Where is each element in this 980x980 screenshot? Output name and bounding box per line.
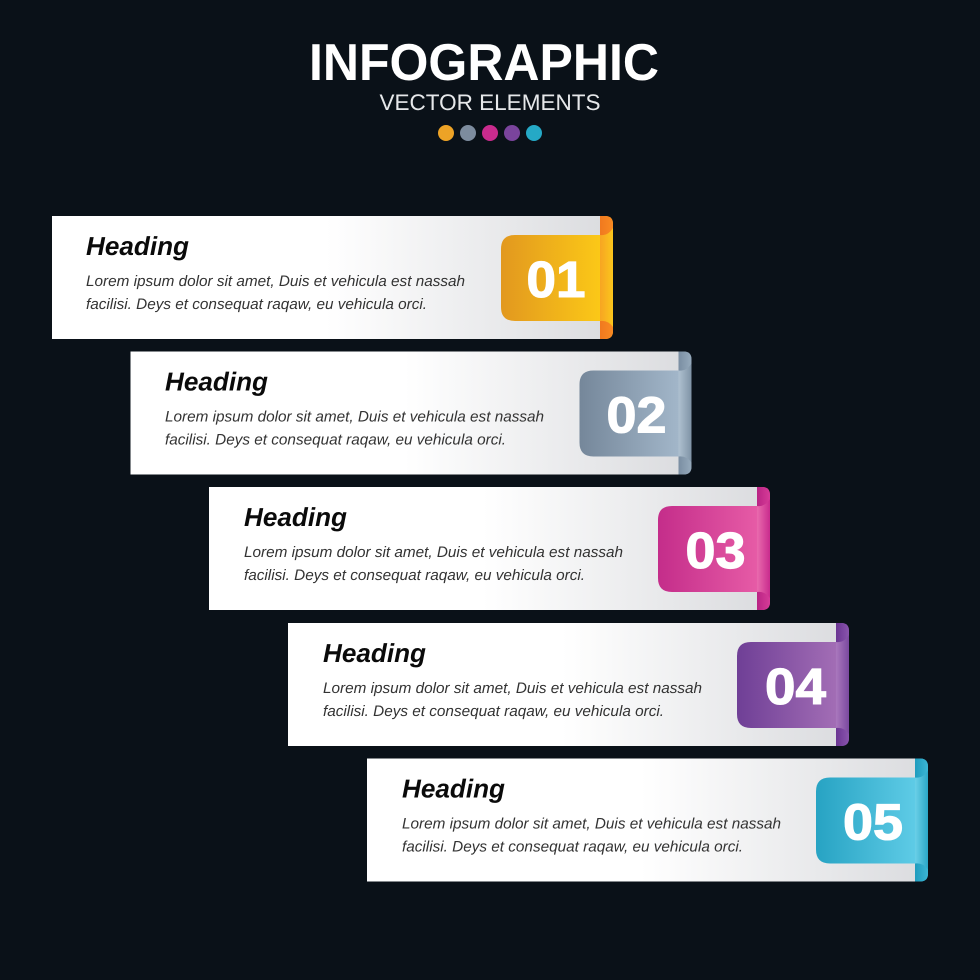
ribbon top fold xyxy=(600,216,613,235)
number: 04 xyxy=(765,658,827,715)
subtitle: VECTOR ELEMENTS xyxy=(380,90,600,115)
number: 03 xyxy=(686,522,746,579)
panel: step 04 xyxy=(288,623,849,746)
ribbon xyxy=(757,487,770,610)
body text line 2: facilisi. Deys et consequat raqaw, eu vehicula orci. xyxy=(402,838,743,856)
ribbon top fold xyxy=(915,758,928,778)
panel: step 01 xyxy=(52,216,613,339)
ribbon top fold xyxy=(678,352,692,371)
ribbon bottom fold xyxy=(757,592,770,610)
heading: Heading xyxy=(86,231,189,261)
card background xyxy=(367,758,915,882)
body text: Lorem ipsum dolor sit amet, Duis et vehicula est nassah xyxy=(244,544,623,561)
heading: Heading xyxy=(323,638,426,668)
number badge xyxy=(816,778,915,864)
ribbon bottom fold xyxy=(678,456,692,474)
body text line 2: facilisi. Deys et consequat raqaw, eu vehicula orci. xyxy=(165,432,506,448)
ribbon top fold xyxy=(836,623,849,642)
ribbon top fold xyxy=(757,487,770,506)
ribbon xyxy=(600,216,613,339)
card background xyxy=(52,216,600,339)
ribbon bottom fold xyxy=(915,863,928,882)
heading: Heading xyxy=(165,366,268,396)
ribbon bottom fold xyxy=(600,321,613,339)
number badge xyxy=(658,506,757,592)
card background xyxy=(288,623,836,746)
body text line 2: facilisi. Deys et consequat raqaw, eu vehicula orci. xyxy=(86,296,427,313)
number badge xyxy=(501,235,600,321)
number: 01 xyxy=(526,251,586,308)
ribbon xyxy=(915,758,928,882)
panel: step 03 xyxy=(209,487,770,610)
number badge xyxy=(737,642,836,728)
colour dots xyxy=(438,125,542,141)
ribbon xyxy=(678,352,692,474)
heading: Heading xyxy=(244,502,347,532)
title: INFOGRAPHIC xyxy=(309,34,659,92)
panel: step 02 xyxy=(130,352,692,474)
ribbon bottom fold xyxy=(836,728,849,746)
number badge xyxy=(580,370,678,456)
ribbon xyxy=(836,623,849,746)
body text: Lorem ipsum dolor sit amet, Duis et vehicula est nassah xyxy=(402,816,781,832)
heading: Heading xyxy=(402,774,505,804)
card background xyxy=(209,487,757,610)
body text: Lorem ipsum dolor sit amet, Duis et vehicula est nassah xyxy=(165,408,544,426)
body text: Lorem ipsum dolor sit amet, Duis et vehicula est nassah xyxy=(323,680,702,697)
body text line 2: facilisi. Deys et consequat raqaw, eu vehicula orci. xyxy=(323,703,664,720)
number: 02 xyxy=(606,386,666,444)
body text line 2: facilisi. Deys et consequat raqaw, eu vehicula orci. xyxy=(244,567,585,584)
body text: Lorem ipsum dolor sit amet, Duis et vehicula est nassah xyxy=(86,273,465,290)
panel: step 05 xyxy=(367,758,928,882)
number: 05 xyxy=(843,794,903,850)
card background xyxy=(130,352,678,474)
